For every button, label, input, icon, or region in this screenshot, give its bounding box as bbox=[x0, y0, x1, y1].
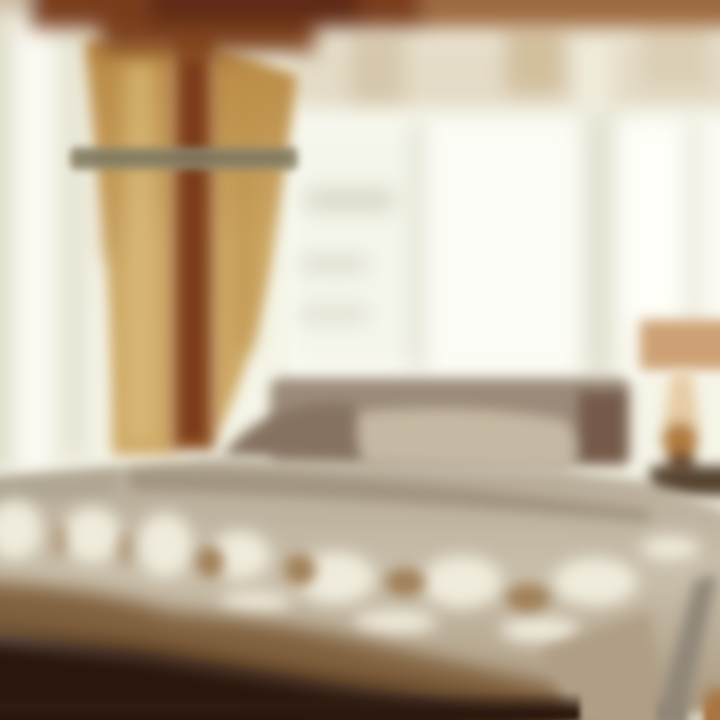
night table shadow bbox=[650, 466, 720, 496]
left sheer curtain bbox=[0, 0, 100, 480]
valance bbox=[295, 30, 720, 115]
headboard bbox=[270, 378, 630, 466]
bed quilt bbox=[0, 458, 720, 720]
dark floor under bed bbox=[0, 628, 590, 720]
golden curtains bbox=[84, 40, 298, 455]
quilt dark diamonds bbox=[53, 522, 550, 612]
quilt light patches bbox=[0, 500, 700, 643]
right quilt drop and bed leg bbox=[540, 574, 720, 720]
lamp base bbox=[662, 372, 700, 474]
pillow: front bbox=[357, 408, 576, 472]
pillows bbox=[222, 403, 576, 472]
wooden post bbox=[172, 30, 214, 450]
lamp shade bbox=[640, 320, 720, 370]
wooden ceiling bbox=[0, 0, 720, 52]
curtain rod bbox=[70, 147, 298, 170]
table lamp bbox=[640, 320, 720, 474]
quilt lower fold bbox=[0, 580, 570, 720]
quilt folds bbox=[0, 470, 650, 522]
window panels and sheer drapes bbox=[290, 100, 700, 380]
curtain folds bbox=[104, 60, 254, 440]
bottom edge finish bbox=[0, 692, 720, 720]
pillow: back bbox=[222, 403, 366, 460]
